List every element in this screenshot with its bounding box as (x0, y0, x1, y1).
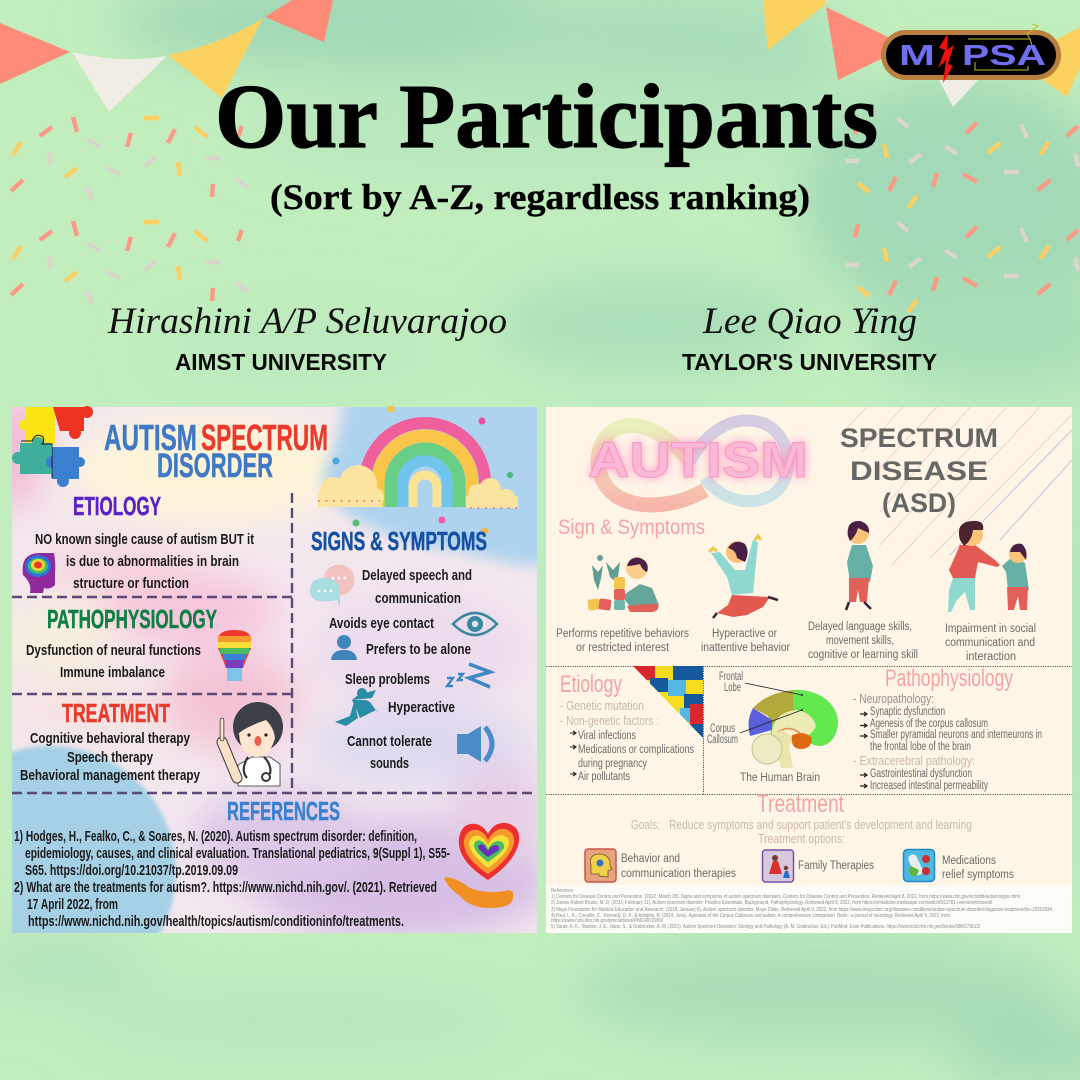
section: signs and symptoms (310, 526, 497, 772)
section: pathophysiology (26, 604, 251, 681)
section: pathophysiology: Increased intestinal permeability (870, 780, 988, 792)
illustration: human brain: Callosum (707, 734, 738, 746)
logo: infinity ribbon (598, 420, 788, 505)
heading: spectrum disease asd: (ASD) (882, 488, 956, 518)
icon: speaker (457, 726, 492, 762)
logo: MYPSA: M (899, 40, 935, 72)
heading: spectrum disease asd: DISEASE (850, 456, 988, 486)
section: treatment: Family Therapies (798, 860, 874, 872)
section: pathophysiology: Gastrointestinal dysfunction (870, 768, 972, 780)
section: references: S65. https://doi.org/10.21037/tp.2019.09.09 (25, 862, 238, 879)
subtitle: (Sort by A-Z, regardless ranking) (270, 177, 810, 217)
graphic: puzzle corner (633, 666, 703, 738)
icon: sleep zzz (447, 664, 490, 687)
illustration: doctor (222, 702, 283, 786)
section: pathophysiology: - Extracerebral pathology: (853, 753, 975, 768)
icon: family therapy (762, 850, 794, 882)
section: pathophysiology (853, 665, 1042, 792)
section: treatment: Goals: (631, 817, 660, 832)
section: sign and symptoms: Delayed language skills, (808, 621, 912, 633)
section: sign and symptoms: Sign & Symptoms (558, 516, 705, 539)
section: treatment (20, 698, 283, 786)
section: signs and symptoms: Hyperactive (388, 699, 455, 716)
logo: MYPSA (884, 24, 1058, 83)
section: sign and symptoms: or restricted interest (576, 642, 670, 654)
section: sign and symptoms: cognitive or learning skill (808, 649, 918, 661)
section: sign and symptoms: communication and (945, 637, 1035, 649)
section: references (14, 796, 519, 930)
section: etiology: - Genetic mutation (560, 698, 644, 713)
section: treatment: Speech therapy (67, 749, 153, 766)
section: etiology: - Non-genetic factors : (560, 713, 659, 728)
section: pathophysiology: Immune imbalance (60, 664, 165, 681)
decorative diagonal lines (840, 407, 1072, 565)
section: etiology: ETIOLOGY (73, 491, 161, 521)
section: references: 1) Hodges, H., Fealko, C., & Soares, N. (2020). Autism spectrum disorder: definition, (14, 828, 417, 845)
section: signs and symptoms: Delayed speech and (362, 567, 472, 584)
section: sign and symptoms: interaction (966, 651, 1016, 663)
icon: eye (453, 613, 497, 635)
section: signs and symptoms: Sleep problems (345, 671, 430, 688)
references block: 2) James Robert Brasic, M. D. (2022, February 11). Autism spectrum disorder: Practice Essentials, Background, Pathophysiology. Retrieved April 8, 2022, from https://emedicine.medscape.com/article/912781-overview#showall (551, 900, 992, 906)
section: etiology: Etiology (560, 671, 622, 698)
section: pathophysiology: PATHOPHYSIOLOGY (47, 604, 217, 634)
heading: autism spectrum disorder (104, 417, 328, 485)
heading: spectrum disease asd: SPECTRUM (840, 423, 998, 453)
section: etiology: Medications or complications (578, 744, 694, 756)
heading: autism spectrum disorder: AUTISM (104, 417, 197, 458)
heading: autism neon: AUTISM (588, 432, 808, 488)
section: pathophysiology: the frontal lobe of the brain (870, 741, 971, 753)
icon: rainbow light bulb (218, 630, 251, 681)
illustration: human brain: Corpus (710, 723, 735, 735)
section: etiology (560, 671, 694, 783)
section: treatment: Treatment options: (758, 831, 845, 846)
illustration: human brain (707, 671, 838, 784)
illustration: hyperactive child (709, 536, 778, 618)
section: signs and symptoms: communication (375, 590, 461, 607)
section: sign and symptoms: movement skills, (826, 635, 894, 647)
icon: behavior therapy head (585, 849, 616, 882)
section: etiology: is due to abnormalities in brain (66, 553, 239, 570)
illustration: human brain: Frontal (719, 671, 743, 683)
icon: person (331, 635, 357, 660)
section: etiology: NO known single cause of autism BUT it (35, 531, 254, 548)
section: treatment: Reduce symptoms and support patient's development and learning (669, 817, 972, 832)
section: pathophysiology: Synaptic dysfunction (870, 706, 945, 718)
references block: https://www.ncbi.nlm.nih.gov/pmc/articles/PMC4072909/ (551, 918, 663, 924)
section: treatment: communication therapies (621, 868, 736, 880)
section: pathophysiology: Agenesis of the corpus callosum (870, 718, 988, 730)
icon: speech bubbles (310, 564, 354, 608)
icon: jumping figure (335, 688, 380, 726)
section: treatment: TREATMENT (62, 698, 170, 728)
section: etiology: Viral infections (578, 730, 636, 742)
section: sign and symptoms: Hyperactive or (712, 628, 777, 640)
section: references: 2) What are the treatments for autism?. https://www.nichd.nih.gov/. (2021). Retrieved (14, 879, 437, 896)
confetti left (11, 117, 248, 304)
illustration: human brain: The Human Brain (740, 772, 820, 784)
confetti right (845, 118, 1078, 312)
illustration: child stacking blocks (587, 555, 659, 612)
icon: brain scan head (23, 553, 55, 593)
heading: autism neon: AUTISM (588, 432, 808, 488)
section: references: 17 April 2022, from (27, 896, 118, 913)
section: pathophysiology: Dysfunction of neural functions (26, 642, 201, 659)
bunting flags left (0, 0, 333, 112)
section: etiology: Air pollutants (578, 771, 630, 783)
section: signs and symptoms: Cannot tolerate (347, 733, 432, 750)
section: treatment: relief symptoms (942, 869, 1014, 881)
dotted dividers (546, 666, 1072, 795)
section: treatment: Treatment (757, 790, 844, 818)
logo: MYPSA: PSA (962, 40, 1046, 72)
section: treatment: Medications (942, 855, 996, 867)
panel: left poster (12, 406, 537, 933)
section: sign and symptoms: Performs repetitive behaviors (556, 628, 689, 640)
section: sign and symptoms: Impairment in social (945, 623, 1036, 635)
references block: 4) Paul, L. K., Corsello, C., Kennedy, D. P., & Adolphs, R. (2014, June). Agenesis of the Corpus Callosum and autism: A comprehensive comparison. Brain : a journal of neurology. Retrieved April 9, 2022, from (551, 913, 950, 919)
section: pathophysiology: Pathophysiology (885, 665, 1013, 692)
section: signs and symptoms: sounds (370, 755, 409, 772)
illustration: rainbow with clouds (318, 406, 518, 534)
section: treatment: Cognitive behavioral therapy (30, 730, 191, 747)
section: etiology (23, 491, 254, 593)
poster background (12, 407, 537, 933)
university left: AIMST UNIVERSITY (175, 349, 387, 375)
section: sign and symptoms: inattentive behavior (701, 642, 790, 654)
section: treatment: Behavior and (621, 853, 680, 865)
section: treatment (585, 790, 1014, 882)
heading: spectrum disease asd (840, 423, 998, 518)
section: signs and symptoms: SIGNS & SYMPTOMS (311, 526, 487, 556)
university right: TAYLOR'S UNIVERSITY (682, 349, 937, 375)
references block (546, 885, 1072, 933)
icon: puzzle pieces (12, 406, 93, 487)
section: pathophysiology: - Neuropathology: (853, 691, 934, 706)
section: references: epidemiology, causes, and clinical evaluation. Translational pediatrics, 9(Suppl 1), S55- (25, 845, 450, 862)
section: signs and symptoms: Avoids eye contact (329, 615, 434, 632)
section: etiology: structure or function (73, 575, 189, 592)
panel: right poster (546, 407, 1072, 933)
section: references: REFERENCES (227, 796, 340, 826)
title: Our Participants (215, 66, 878, 167)
icon: rainbow heart in hand (444, 823, 519, 908)
illustration: two children (948, 521, 1029, 612)
participant name left: Hirashini A/P Seluvarajoo (107, 301, 507, 342)
section: signs and symptoms: Prefers to be alone (366, 641, 471, 658)
section: treatment: Behavioral management therapy (20, 767, 201, 784)
bunting flags right (763, 0, 1080, 107)
heading: autism spectrum disorder: DISORDER (157, 447, 273, 485)
section: sign and symptoms (556, 516, 1036, 663)
dividers (12, 493, 537, 793)
illustration: human brain: Lobe (724, 682, 741, 694)
section: references: https://www.nichd.nih.gov/health/topics/autism/conditioninfo/treatments. (28, 913, 404, 930)
references block: 5) Sauer, A. K., Stanton, J. E., Hans, S., & Grabrucker, A. M. (2021). Autism Spectrum Disorders: Etiology and Pathology (A. M. Grabrucker, Ed.). PubMed; Exon Publications. https://www.ncbi.nlm.nih.gov/books/NBK573613/ (551, 924, 980, 930)
illustration: shy child (846, 521, 873, 610)
references block: References: (551, 888, 574, 894)
poster background (546, 407, 1072, 933)
participant name right: Lee Qiao Ying (702, 301, 917, 342)
heading: autism spectrum disorder: SPECTRUM (201, 417, 328, 458)
icon: medication pills (904, 850, 934, 882)
section: etiology: during pregnancy (578, 758, 647, 770)
